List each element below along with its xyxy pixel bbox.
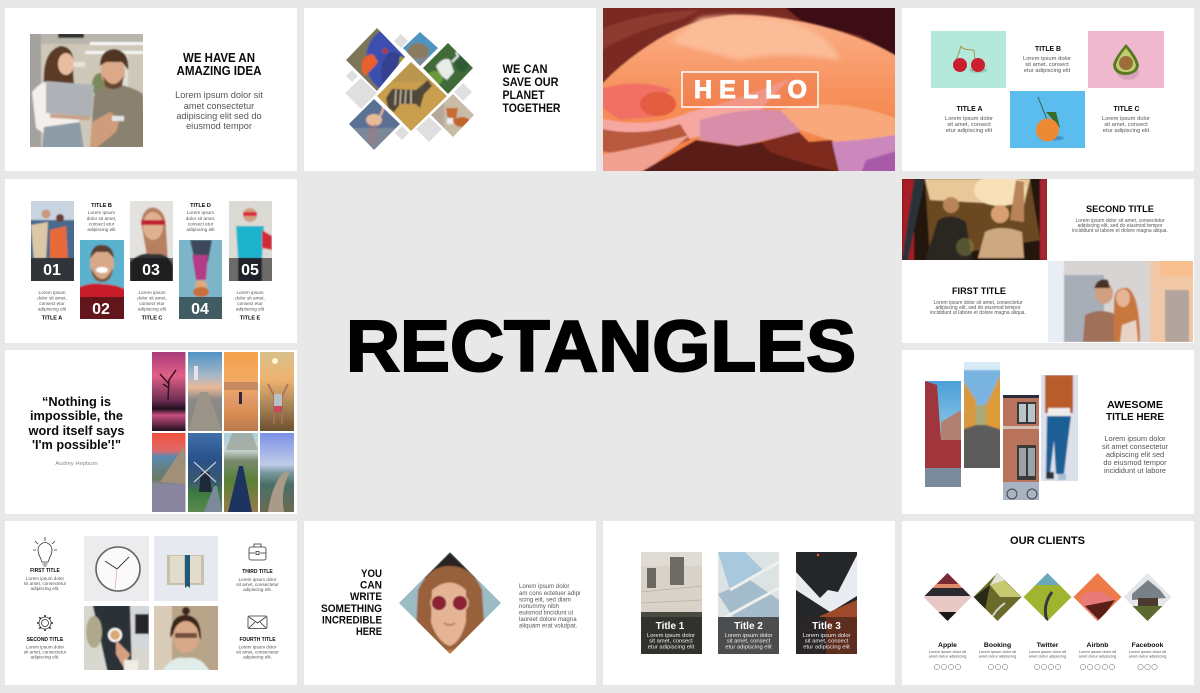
photo: avocado [1088, 31, 1164, 88]
body text [519, 583, 580, 630]
text: first title: Lorem ipsum dolor sit amet, consectetur [934, 300, 1023, 306]
icon: light bulb [33, 537, 57, 566]
body text: laoreet dolore magna [519, 616, 577, 623]
card: title 3 [796, 552, 857, 654]
text: first title: incididunt ut labore et dolore magna aliqua. [930, 310, 1026, 316]
text: title a c e: TITLE E [240, 316, 261, 322]
social icon circles [934, 664, 1157, 670]
text: first title: sit amet, consectetur [24, 581, 67, 586]
panel: numbered strips 01 to 05 [5, 179, 297, 343]
body text: am cons ectetuer adipi [519, 590, 580, 597]
heading [176, 51, 262, 78]
card: title 1 [641, 552, 702, 654]
body text: adipiscing elit sed [1106, 450, 1164, 459]
text: title a c e: consect etur [39, 301, 65, 306]
text: first title: adipiscing elit, sed do eiusmod tempor [935, 305, 1021, 311]
panel: first and second title [898, 174, 1197, 346]
card: title 2: etur adipiscing elit [725, 644, 772, 650]
text: second title: Lorem ipsum dolor sit amet, consectetur [1076, 218, 1165, 224]
text: title a c e: dolor sit amet, [137, 296, 167, 300]
text: title b and d: TITLE B [91, 203, 112, 209]
text: third title: Lorem ipsum dolor [238, 577, 277, 582]
panel: quote [5, 350, 297, 514]
photo: parrot [346, 28, 405, 91]
body text: sit amet consectetur [1102, 442, 1169, 451]
text: title a c e: consect etur [237, 301, 263, 306]
body text: aliquam erat volutpat. [519, 622, 578, 630]
heading [1106, 399, 1164, 423]
strip 05 [229, 201, 272, 281]
text: second title [24, 637, 67, 660]
text: second title: Lorem ipsum dolor [26, 644, 64, 650]
card: title 2 [718, 552, 779, 654]
heading: AMAZING IDEA [176, 64, 262, 78]
photo: forest road [224, 433, 258, 512]
photo: cherries [931, 31, 1006, 88]
text: title b and d: Lorem ipsum [187, 210, 214, 215]
photo: paddleboard sunset [224, 352, 258, 431]
text: title b and d: adipiscing elit [186, 227, 215, 232]
card: title 3: etur adipiscing elit [803, 644, 850, 650]
text: title a: TITLE A [956, 104, 983, 113]
hello frame and label: HELLO [694, 76, 807, 104]
quote text: 'I'm possible'!" [32, 437, 121, 452]
text: title b and d [87, 203, 215, 232]
client descriptions: amet cletur adipiscing [929, 654, 966, 658]
strip 02 [80, 240, 124, 319]
text: title b and d: dolor sit amet, [87, 216, 116, 221]
heading: PLANET [502, 90, 544, 102]
icon: gear [37, 615, 53, 631]
client descriptions: Lorem ipsum dolor sit [1079, 649, 1117, 654]
client names: Airbnb [1087, 642, 1108, 649]
text: title c: etur adipiscing elit [1103, 128, 1150, 134]
heading: WE HAVE AN [183, 51, 255, 65]
text: title b: TITLE B [1035, 44, 1062, 53]
heading: TOGETHER [502, 103, 561, 115]
client descriptions: amet cletur adipiscing [1129, 654, 1166, 658]
client diamond: booking [973, 573, 1022, 621]
quote text: word itself says [28, 423, 125, 438]
body text: nonummy nibh [519, 603, 559, 610]
client diamond: twitter [1023, 573, 1072, 621]
text: first title: FIRST TITLE [30, 568, 61, 574]
panel: awesome title here [902, 350, 1194, 514]
photo: orange [1010, 91, 1085, 148]
text: title b and d: consect etur [89, 222, 115, 226]
text: title b and d: dolor sit amet, [186, 216, 215, 221]
numbers: 04 [191, 301, 209, 318]
heading: WE CAN [502, 64, 548, 76]
text: title c [1102, 104, 1150, 134]
text: third title: sit amet, consectetur [236, 582, 279, 587]
panel: our clients [902, 521, 1194, 685]
text: title a c e: adipiscing elit [138, 306, 167, 312]
text: title a c e: adipiscing elit [38, 306, 67, 312]
text: first title: adipiscing elit. [31, 586, 59, 591]
body text: Lorem ipsum dolor [1104, 434, 1166, 443]
text: second title: sit amet, consectetur [24, 650, 67, 654]
heading: TITLE HERE [1106, 411, 1164, 423]
photo grid [152, 352, 294, 512]
numbers: 03 [142, 262, 160, 279]
photo: wall clock [84, 536, 149, 601]
client descriptions: Lorem ipsum dolor sit [929, 649, 967, 654]
panel: four titles with icons [5, 521, 297, 685]
number overlays [31, 258, 272, 319]
strip 03 [130, 201, 173, 281]
card: title 2: Title 2 [734, 621, 763, 632]
photo: colleagues with laptop [30, 34, 143, 147]
client diamond: facebook [1123, 573, 1172, 621]
photo: coffee on lap [84, 606, 149, 670]
client descriptions: amet cletur adipiscing [1079, 654, 1116, 658]
photo: couple kissing [1048, 261, 1193, 342]
body text: Lorem ipsum dolor sit [175, 90, 263, 100]
text: title a c e: Lorem ipsum [138, 290, 166, 295]
body text: scing elit, sed diam [519, 596, 571, 604]
photo: zebra [377, 62, 447, 131]
photo: small bird [403, 32, 438, 66]
panel: you can write something [304, 521, 596, 685]
photo strip: backpacker [1038, 372, 1081, 484]
text: third title: adipiscing elit. [243, 587, 272, 592]
panel: hello canyon [598, 3, 900, 176]
text: title a [945, 104, 993, 134]
strip 01 [31, 201, 74, 281]
card: title 1: Lorem ipsum dolor [647, 633, 695, 639]
photo strip: red buildings [925, 381, 961, 487]
quote text: impossible, the [30, 408, 123, 423]
text: title a c e: Lorem ipsum [236, 290, 264, 295]
card: title 1: etur adipiscing elit [648, 644, 695, 650]
quote author: Audrey Hepburn [55, 461, 98, 467]
text: second title: adipiscing elit. [31, 654, 59, 660]
card: title 3: sit amet, consect [805, 638, 849, 644]
photo strip: brick building [1003, 395, 1039, 500]
text: first title: FIRST TITLE [952, 286, 1006, 296]
text: third title [236, 569, 279, 592]
photo: mountain road [152, 433, 186, 512]
photo: fox [431, 94, 474, 137]
client descriptions: Lorem ipsum dolor sit [1129, 649, 1167, 654]
text: first title [930, 286, 1026, 316]
text: second title: SECOND TITLE [27, 637, 64, 643]
heading: SOMETHING [321, 603, 382, 615]
photo: woman in sunglasses [399, 552, 501, 654]
heading [321, 568, 382, 638]
text: fourth title: Lorem ipsum dolor [238, 644, 277, 650]
text: title b: sit amet, consect [1025, 62, 1069, 68]
text: second title: adipiscing elit, sed do eiusmod tempor [1077, 223, 1163, 229]
photo: canyon [598, 3, 900, 176]
title: RECTANGLES: RECTANGLES [346, 307, 856, 387]
text: second title: incididunt ut labore et dolore magna aliqua. [1072, 228, 1168, 234]
panel: title a b c fruits [902, 8, 1194, 171]
client names: Apple [938, 642, 957, 649]
client diamond: apple [923, 573, 972, 621]
text: title a: etur adipiscing elit [946, 128, 993, 134]
text: title c: Lorem ipsum dolor [1102, 116, 1150, 122]
card: title 2: Lorem ipsum dolor [724, 633, 773, 639]
card: title 3: Title 3 [812, 621, 841, 632]
numbers: 01 [43, 262, 61, 279]
photo: egret [423, 43, 473, 94]
photo: friends in car [902, 179, 1047, 260]
text: fourth title: FOURTH TITLE [239, 637, 276, 643]
text: fourth title: sit amet, consectetur [236, 650, 279, 654]
card: title 1: sit amet, consect [649, 638, 693, 644]
text: second title: SECOND TITLE [1086, 204, 1154, 214]
decorative grey diamonds [345, 34, 472, 142]
client names: Twitter [1037, 642, 1059, 649]
client names [938, 642, 1164, 649]
text: first title: Lorem ipsum dolor [26, 576, 64, 581]
body text [1102, 434, 1169, 475]
panel: we have an amazing idea [5, 8, 297, 171]
panel: title 1 2 3 [603, 521, 895, 685]
photo: lighthouse pier [188, 352, 222, 431]
body text: do eiusmod tempor [1103, 458, 1167, 467]
photo: great wall [260, 433, 294, 512]
client names: Booking [984, 642, 1011, 649]
text: title c: sit amet, consect [1104, 122, 1148, 128]
client descriptions: amet cletur adipiscing [979, 654, 1016, 658]
text: title a c e [37, 290, 265, 322]
heading: YOU [361, 568, 382, 580]
client diamond: airbnb [1073, 573, 1122, 621]
body text: Lorem ipsum dolor [519, 583, 569, 590]
card: title 1: Title 1 [656, 621, 685, 632]
photo strip: old street [964, 362, 1000, 468]
text: title b: Lorem ipsum dolor [1023, 56, 1071, 62]
hello frame and label [682, 72, 818, 107]
numbers: 02 [92, 301, 110, 318]
text: title a: sit amet, consect [947, 122, 991, 128]
text: title c: TITLE C [1114, 104, 1140, 113]
heading: SAVE OUR [502, 77, 559, 89]
client names: Facebook [1132, 642, 1164, 649]
text: fourth title [236, 637, 279, 660]
heading: OUR CLIENTS [1010, 535, 1085, 547]
photo: woman in glasses [154, 606, 218, 670]
text: title a c e: dolor sit amet, [235, 296, 265, 300]
panel: we can save our planet together [304, 8, 596, 171]
text: title a c e: adipiscing elit [236, 306, 265, 312]
icon: envelope [248, 616, 267, 628]
heading: HERE [356, 626, 382, 638]
heading: WRITE [350, 591, 382, 603]
photo: tree at dusk [152, 352, 186, 431]
body text: adipiscing elit sed do [176, 111, 262, 121]
text: title b and d: adipiscing elit [87, 227, 116, 232]
body text: eiusmod tempor [186, 121, 252, 131]
heading: INCREDIBLE [322, 614, 382, 626]
body text: incididunt ut labore [1104, 466, 1166, 475]
heading: AWESOME [1107, 399, 1163, 411]
photo: open book [154, 536, 218, 601]
text: title b: etur adipiscing elit [1024, 68, 1071, 74]
quote text [28, 394, 125, 452]
photo: person arms raised [260, 352, 294, 431]
text: title a c e: consect etur [139, 301, 165, 306]
text: title a c e: dolor sit amet, [37, 296, 67, 300]
text: first title [24, 568, 67, 591]
client descriptions [929, 649, 1167, 658]
quote text: “Nothing is [42, 394, 111, 409]
body text [175, 90, 263, 131]
text: title b and d: TITLE D [190, 203, 211, 209]
text: title a c e: TITLE A [42, 316, 62, 322]
text: title a: Lorem ipsum dolor [945, 116, 993, 122]
numbers [43, 262, 259, 318]
icon: briefcase [249, 544, 266, 560]
text: third title: THIRD TITLE [242, 569, 273, 575]
text: fourth title: adipiscing elit. [243, 654, 272, 660]
text: title b and d: Lorem ipsum [88, 210, 115, 215]
photo: windmill [188, 433, 222, 512]
client descriptions: amet cletur adipiscing [1029, 654, 1066, 658]
body text: amet consectetur [184, 101, 254, 111]
client descriptions: Lorem ipsum dolor sit [979, 649, 1017, 654]
strip 04 [179, 240, 222, 319]
text: title a c e: TITLE C [142, 316, 162, 322]
card: title 2: sit amet, consect [727, 638, 771, 644]
client descriptions: Lorem ipsum dolor sit [1029, 649, 1067, 654]
heading: CAN [360, 580, 382, 592]
text: title a c e: Lorem ipsum [38, 290, 66, 295]
text: title b [1023, 44, 1071, 74]
heading [502, 64, 561, 115]
text: title b and d: consect etur [188, 222, 214, 226]
text: second title [1072, 204, 1168, 234]
body text: euismod tincidunt ut [519, 610, 574, 616]
numbers: 05 [241, 262, 259, 279]
card: title 3: Lorem ipsum dolor [802, 633, 851, 639]
photo: flamingo [349, 99, 400, 150]
